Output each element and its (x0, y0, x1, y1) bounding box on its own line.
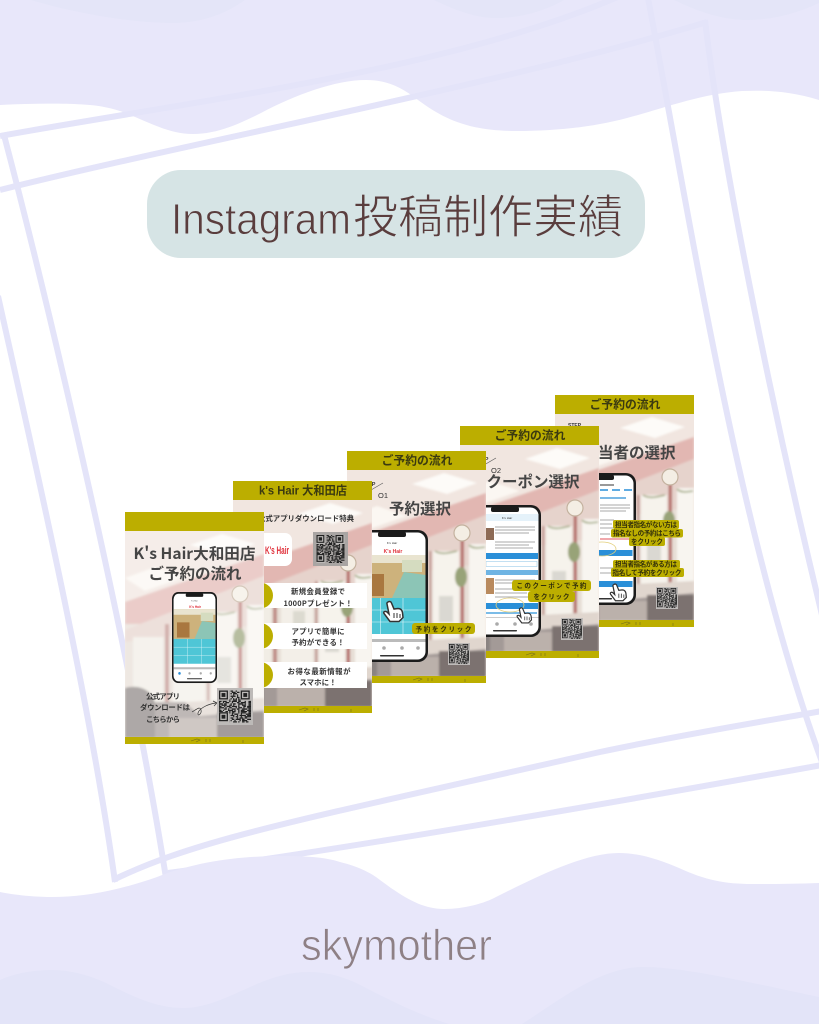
card 5 phone (599, 473, 636, 605)
post card 3: reservation selection (347, 451, 486, 683)
card 4 header: ご予約の流れ (495, 426, 566, 444)
card 5 title: 担当者の選択 (582, 441, 676, 463)
card 3 title: 予約選択 (389, 497, 451, 519)
card 1 curly arrow (192, 701, 217, 715)
card 4 step label: STEP (474, 457, 489, 463)
title text: 投稿制作実績 (353, 181, 623, 247)
card 1 QR code (217, 688, 253, 725)
benefit row 2: 予約ができる！ (292, 637, 344, 648)
benefit row 1: 新規会員登録で (291, 586, 345, 597)
card 4 callout: をクリック (534, 591, 570, 601)
card 5 callout 2 (611, 558, 684, 577)
card 1 phone (172, 592, 217, 683)
card 2 logo (264, 533, 292, 566)
top wave (0, 0, 819, 134)
card 3 callout: 予約をクリック (416, 624, 472, 634)
card 4 callout: このクーポンで予約 (516, 580, 587, 590)
benefit row 3: お得な最新情報が (288, 666, 351, 677)
bottom wave (0, 853, 819, 1024)
card 4 callout (512, 580, 591, 602)
card 3 hand icon (384, 601, 403, 622)
card 2 QR code (313, 532, 348, 566)
title text (171, 181, 623, 247)
brand name: skymother (301, 921, 492, 970)
title pill (147, 170, 645, 258)
card 4 step label: O2 (491, 466, 501, 475)
benefit row 3: スマホに！ (300, 677, 336, 688)
card 2 logo: K's Hair (265, 545, 289, 557)
card 1 title: K's Hair大和田店 (134, 542, 256, 564)
card 3 header: ご予約の流れ (382, 452, 453, 468)
card 3 step label (372, 482, 388, 498)
card 1 download text: 公式アプリ (146, 691, 180, 702)
card 4 background (460, 426, 599, 658)
card 4 phone (486, 505, 541, 637)
title text: Instagram (171, 195, 351, 244)
card 1 download text (140, 691, 191, 725)
card 4 step label (486, 457, 501, 473)
post card 5: staff selection (555, 395, 694, 627)
card 5 callout 1 (611, 519, 683, 546)
card 5 callout 2: 担当者指名がある方は (615, 558, 677, 568)
benefit row 1 (264, 583, 367, 608)
post card 4: coupon selection (460, 426, 599, 658)
benefit row 2 (264, 623, 367, 649)
card 5 QR code (656, 587, 678, 609)
card 3 phone (372, 530, 428, 662)
card 5 step label: STEP (568, 423, 582, 429)
card 2 subheading: 公式アプリダウンロード特典 (258, 513, 355, 524)
card 3 QR code (448, 643, 470, 665)
card 4 title: クーポン選択 (486, 470, 580, 492)
post card 1: cover (125, 512, 264, 744)
card 5 hand icon (610, 584, 626, 601)
card 5 header: ご予約の流れ (590, 396, 661, 412)
card 5 callout 2: 指名して予約をクリック (612, 567, 682, 577)
card 4 QR code (561, 618, 583, 640)
benefit row 2: アプリで簡単に (292, 626, 344, 637)
card 4 hand icon (517, 608, 532, 623)
card 1 download text: ダウンロードは (140, 702, 191, 713)
card 1 download text: こちらから (146, 714, 180, 725)
card 2 header: k's Hair 大和田店 (259, 484, 347, 498)
benefit row 1: 1000Pプレゼント！ (284, 598, 352, 609)
card 5 callout 1: 担当者指名がない方は (615, 519, 677, 529)
card 2 background (233, 481, 372, 713)
card 1 title: ご予約の流れ (148, 562, 242, 584)
card 1 title (134, 546, 255, 581)
card 5 callout 1: 指名なしの予約はこちら (613, 528, 681, 538)
card 5 callout 1: をクリック (631, 536, 663, 546)
card 5 background (555, 395, 694, 627)
card 3 step label: O1 (378, 491, 388, 500)
benefit row 3 (264, 662, 367, 688)
card 3 background (347, 451, 486, 683)
post card 2: app benefits (229, 481, 372, 713)
card 3 step label: STEP (361, 482, 376, 488)
card 1 background (125, 512, 264, 744)
